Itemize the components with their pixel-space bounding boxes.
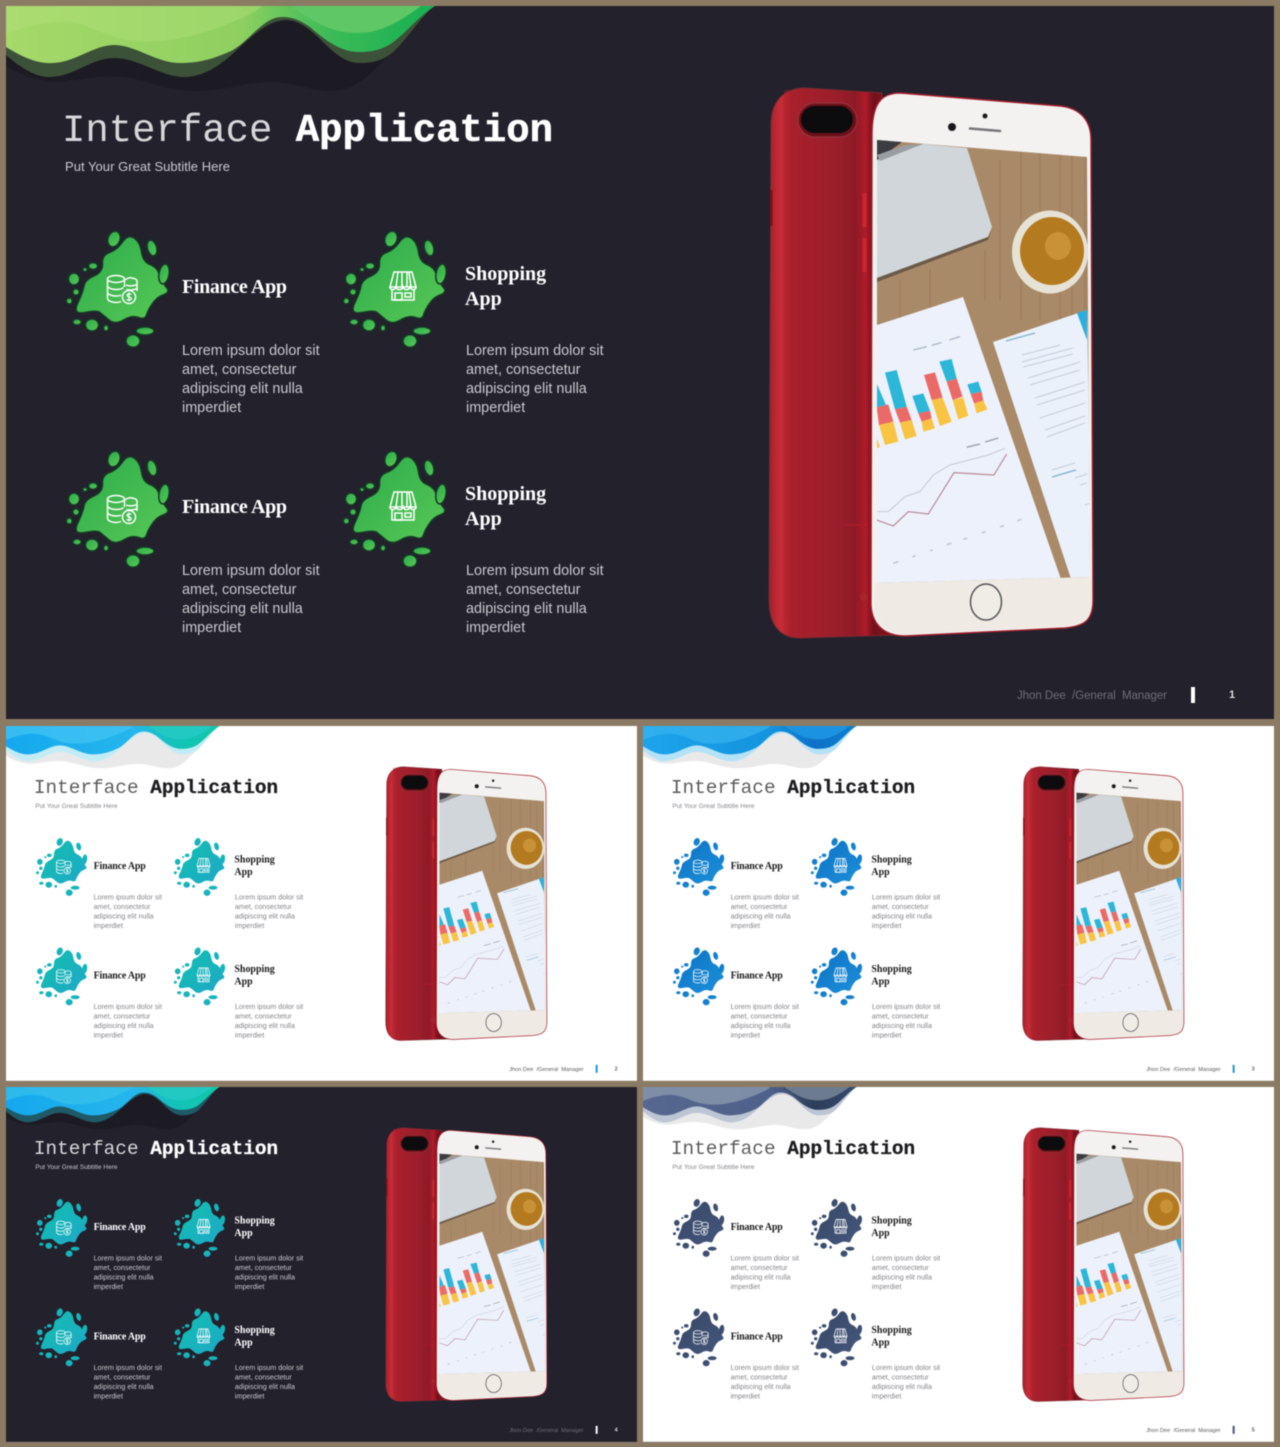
icon: shopping blob lower: [811, 947, 863, 1005]
heading: finance app lower: Finance App: [94, 1331, 146, 1342]
text block: finance description: amet, consectetur: [731, 903, 788, 911]
text block: shopping description: amet, consectetur: [235, 903, 292, 911]
text block: finance description: adipiscing elit nulla: [94, 1274, 154, 1282]
heading: shopping app lower: App: [234, 976, 253, 987]
text block: shopping description lower: Lorem ipsum dolor sit: [872, 1003, 940, 1011]
heading: finance app: Finance App: [731, 861, 783, 872]
text block: finance description: amet, consectetur: [731, 1264, 788, 1272]
icon: finance blob: [673, 837, 725, 896]
text block: shopping description lower: amet, consectetur: [872, 1013, 929, 1021]
title: Interface Application: [34, 777, 278, 799]
text block: finance description: adipiscing elit nulla: [731, 1274, 791, 1282]
heading: shopping app: App: [234, 867, 253, 878]
text block: finance description: imperdiet: [94, 922, 123, 930]
text block: shopping description: imperdiet: [872, 922, 901, 930]
heading: shopping app: App: [871, 867, 890, 878]
text block: finance description: amet, consectetur: [94, 903, 151, 911]
text block: finance description lower: adipiscing elit nulla: [731, 1383, 791, 1391]
text block: shopping description lower: imperdiet: [235, 1032, 264, 1040]
text block: finance description: Lorem ipsum dolor sit: [94, 894, 162, 902]
text block: finance description lower: imperdiet: [94, 1393, 123, 1401]
text block: shopping description lower: imperdiet: [872, 1032, 901, 1040]
header wave green: [6, 6, 435, 91]
heading: finance app: Finance App: [731, 1222, 783, 1233]
heading: finance app: Finance App: [94, 861, 146, 872]
text block: finance description lower: amet, consectetur: [94, 1013, 151, 1021]
icon: shopping blob lower: [174, 1308, 226, 1366]
text block: finance description lower: adipiscing elit nulla: [94, 1022, 154, 1030]
text block: shopping description: amet, consectetur: [872, 903, 929, 911]
text block: finance description: Lorem ipsum dolor sit: [731, 1255, 799, 1263]
text block: finance description lower: imperdiet: [731, 1393, 760, 1401]
text block: shopping description: adipiscing elit nulla: [235, 913, 295, 921]
footer: 1: [1229, 689, 1235, 701]
text block: finance description lower: amet, consectetur: [94, 1374, 151, 1382]
text block: finance description: Lorem ipsum dolor sit: [731, 894, 799, 902]
text block: shopping description: amet, consectetur: [235, 1264, 292, 1272]
text block: finance description lower: Lorem ipsum dolor sit: [731, 1364, 799, 1372]
text block: shopping description: amet, consectetur: [466, 362, 581, 378]
phone mockup: [1023, 767, 1185, 1040]
icon: shopping blob lower: [811, 1308, 863, 1366]
text block: shopping description: imperdiet: [235, 1283, 264, 1291]
title: Interface Application: [62, 109, 553, 153]
icon: shopping blob lower: [343, 449, 448, 567]
footer: 2: [615, 1066, 618, 1072]
title: Interface Application: [34, 1138, 278, 1160]
icon: finance blob: [66, 229, 171, 347]
panel: small dark teal slide: [6, 1087, 637, 1442]
text block: shopping description lower: adipiscing elit nulla: [235, 1022, 295, 1030]
panel: small white teal slide: [6, 726, 637, 1081]
text block: shopping description: amet, consectetur: [872, 1264, 929, 1272]
text block: shopping description: Lorem ipsum dolor sit: [872, 894, 940, 902]
icon: shopping blob: [343, 229, 448, 347]
footer: Jhon Dee /General Manager: [509, 1067, 584, 1073]
icon: finance blob lower: [36, 947, 88, 1005]
heading: shopping app lower: Shopping: [871, 964, 912, 975]
heading: shopping app: Shopping: [871, 1215, 912, 1226]
text block: shopping description lower: amet, consectetur: [235, 1013, 292, 1021]
subtitle: Put Your Great Subtitle Here: [35, 1164, 118, 1171]
text block: finance description: imperdiet: [94, 1283, 123, 1291]
icon: finance blob lower: [673, 1308, 725, 1366]
header wave slate: [643, 1087, 856, 1129]
text block: finance description lower: imperdiet: [182, 620, 241, 636]
subtitle: Put Your Great Subtitle Here: [35, 803, 118, 810]
phone mockup: [386, 767, 548, 1040]
text block: finance description: adipiscing elit nulla: [94, 913, 154, 921]
icon: shopping blob: [174, 1198, 226, 1257]
text block: shopping description lower: Lorem ipsum dolor sit: [235, 1364, 303, 1372]
title: Interface Application: [671, 1138, 915, 1160]
text block: finance description lower: imperdiet: [94, 1032, 123, 1040]
text block: shopping description lower: adipiscing elit nulla: [466, 601, 587, 617]
heading: shopping app lower: Shopping: [465, 483, 546, 505]
icon: shopping blob: [174, 837, 226, 896]
heading: finance app lower: Finance App: [731, 1331, 783, 1342]
heading: finance app: Finance App: [94, 1222, 146, 1233]
text block: finance description: imperdiet: [731, 1283, 760, 1291]
heading: finance app lower: Finance App: [94, 970, 146, 981]
heading: shopping app lower: Shopping: [871, 1325, 912, 1336]
heading: shopping app: Shopping: [234, 854, 275, 865]
heading: finance app: Finance App: [182, 276, 287, 298]
text block: finance description lower: imperdiet: [731, 1032, 760, 1040]
text block: shopping description lower: amet, consectetur: [466, 582, 581, 598]
heading: shopping app lower: App: [871, 976, 890, 987]
panel: large dark green slide: [6, 6, 1274, 719]
heading: shopping app lower: App: [234, 1337, 253, 1348]
text block: finance description: Lorem ipsum dolor sit: [182, 343, 320, 359]
title: Interface Application: [671, 777, 915, 799]
footer: Jhon Dee /General Manager: [1146, 1428, 1221, 1434]
text block: shopping description lower: amet, consectetur: [235, 1374, 292, 1382]
text block: finance description lower: adipiscing elit nulla: [731, 1022, 791, 1030]
footer: [509, 1426, 619, 1434]
footer: 3: [1252, 1066, 1255, 1072]
heading: shopping app: App: [234, 1228, 253, 1239]
text block: finance description lower: Lorem ipsum dolor sit: [182, 563, 320, 579]
footer: [1146, 1065, 1255, 1073]
text block: shopping description: imperdiet: [235, 922, 264, 930]
subtitle: Put Your Great Subtitle Here: [65, 159, 230, 174]
heading: shopping app: Shopping: [465, 263, 546, 285]
heading: shopping app: Shopping: [871, 854, 912, 865]
heading: shopping app lower: Shopping: [234, 1325, 275, 1336]
footer: [1146, 1426, 1255, 1434]
text block: shopping description lower: imperdiet: [872, 1393, 901, 1401]
icon: finance blob: [36, 1198, 88, 1257]
icon: finance blob: [673, 1198, 725, 1257]
footer: [509, 1065, 618, 1073]
phone mockup: [1023, 1128, 1185, 1401]
text block: finance description lower: Lorem ipsum dolor sit: [94, 1003, 162, 1011]
heading: finance app lower: Finance App: [182, 496, 287, 518]
text block: shopping description lower: imperdiet: [466, 620, 525, 636]
text block: finance description lower: adipiscing elit nulla: [182, 601, 303, 617]
heading: shopping app lower: App: [871, 1337, 890, 1348]
panel: small white blue slide: [643, 726, 1274, 1081]
phone mockup: [769, 88, 1095, 638]
footer: 4: [615, 1427, 619, 1433]
footer: [1017, 687, 1235, 703]
heading: shopping app: Shopping: [234, 1215, 275, 1226]
text block: shopping description lower: adipiscing elit nulla: [872, 1022, 932, 1030]
text block: shopping description: Lorem ipsum dolor sit: [235, 894, 303, 902]
text block: shopping description: Lorem ipsum dolor sit: [235, 1255, 303, 1263]
text block: shopping description lower: Lorem ipsum dolor sit: [466, 563, 604, 579]
icon: shopping blob: [811, 1198, 863, 1257]
panel: small white slate slide: [643, 1087, 1274, 1442]
text block: finance description: imperdiet: [731, 922, 760, 930]
heading: shopping app: App: [871, 1228, 890, 1239]
text block: finance description: adipiscing elit nulla: [731, 913, 791, 921]
header wave blue: [643, 726, 856, 768]
heading: shopping app lower: Shopping: [234, 964, 275, 975]
icon: finance blob lower: [36, 1308, 88, 1366]
header wave teal: [6, 726, 219, 768]
text block: shopping description: imperdiet: [872, 1283, 901, 1291]
icon: finance blob: [36, 837, 88, 896]
text block: shopping description: adipiscing elit nulla: [872, 913, 932, 921]
text block: shopping description lower: adipiscing elit nulla: [235, 1383, 295, 1391]
text block: finance description lower: Lorem ipsum dolor sit: [94, 1364, 162, 1372]
header wave teal on dark: [6, 1087, 219, 1129]
icon: finance blob lower: [66, 449, 171, 567]
text block: finance description: amet, consectetur: [94, 1264, 151, 1272]
text block: finance description lower: amet, consectetur: [731, 1013, 788, 1021]
text block: finance description lower: amet, consectetur: [731, 1374, 788, 1382]
text block: shopping description lower: imperdiet: [235, 1393, 264, 1401]
subtitle: Put Your Great Subtitle Here: [672, 803, 755, 810]
icon: finance blob lower: [673, 947, 725, 1005]
text block: shopping description: imperdiet: [466, 400, 525, 416]
text block: shopping description: adipiscing elit nulla: [466, 381, 587, 397]
text block: finance description lower: Lorem ipsum dolor sit: [731, 1003, 799, 1011]
footer: Jhon Dee /General Manager: [1017, 690, 1167, 702]
text block: finance description: Lorem ipsum dolor sit: [94, 1255, 162, 1263]
text block: shopping description: adipiscing elit nulla: [872, 1274, 932, 1282]
footer: 5: [1252, 1427, 1255, 1433]
text block: finance description: imperdiet: [182, 400, 241, 416]
text block: shopping description: Lorem ipsum dolor sit: [466, 343, 604, 359]
text block: shopping description: adipiscing elit nulla: [235, 1274, 295, 1282]
footer: Jhon Dee /General Manager: [509, 1428, 584, 1434]
heading: shopping app: App: [465, 288, 502, 310]
text block: shopping description: Lorem ipsum dolor sit: [872, 1255, 940, 1263]
text block: finance description: amet, consectetur: [182, 362, 297, 378]
heading: shopping app lower: App: [465, 508, 502, 530]
icon: shopping blob lower: [174, 947, 226, 1005]
text block: shopping description lower: Lorem ipsum dolor sit: [235, 1003, 303, 1011]
text block: shopping description lower: amet, consectetur: [872, 1374, 929, 1382]
footer: Jhon Dee /General Manager: [1146, 1067, 1221, 1073]
text block: shopping description lower: adipiscing elit nulla: [872, 1383, 932, 1391]
phone mockup: [386, 1128, 548, 1401]
subtitle: Put Your Great Subtitle Here: [672, 1164, 755, 1171]
text block: finance description: adipiscing elit nulla: [182, 381, 303, 397]
text block: finance description lower: adipiscing elit nulla: [94, 1383, 154, 1391]
heading: finance app lower: Finance App: [731, 970, 783, 981]
icon: shopping blob: [811, 837, 863, 896]
text block: finance description lower: amet, consectetur: [182, 582, 297, 598]
text block: shopping description lower: Lorem ipsum dolor sit: [872, 1364, 940, 1372]
